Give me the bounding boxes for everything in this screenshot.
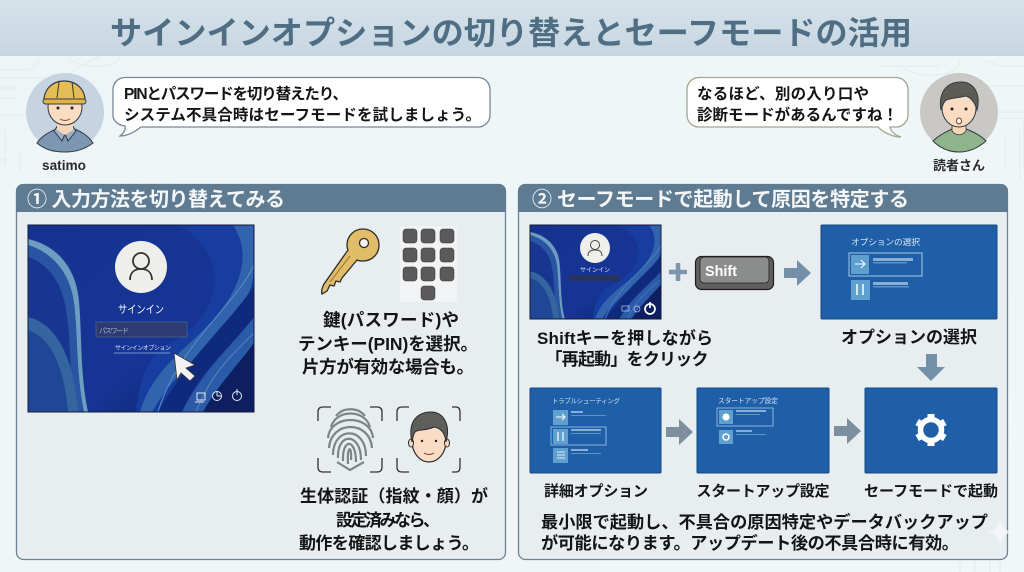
icon: face scan (397, 407, 460, 472)
caption: password and PIN (298, 310, 478, 377)
icon: fingerprint scan (318, 407, 382, 472)
arrow (917, 354, 945, 381)
panel heading 1 (16, 184, 506, 212)
title banner: サインインオプションの切り替えとセーフモードの活用 (110, 15, 912, 51)
caption: biometrics (299, 486, 488, 553)
caption: biometrics: 動作を確認しましょう。 (299, 534, 479, 553)
icon: key (322, 229, 379, 294)
step: troubleshooting screen: トラブルシューティング (552, 396, 621, 405)
speech bubble: satimo: PINとパスワードを切り替えたり、 (124, 85, 348, 103)
arrow (666, 419, 693, 445)
step: sign-in screen (530, 225, 661, 319)
step: troubleshooting screen (530, 388, 661, 473)
caption: password and PIN: 鍵(パスワード)や (323, 310, 459, 330)
caption: boot in safe mode: セーフモードで起動 (864, 483, 998, 500)
sign-in screen (28, 225, 254, 412)
icon: numeric keypad (400, 226, 457, 302)
caption: option selection: オプションの選択 (841, 328, 977, 347)
icon: gear (915, 414, 947, 446)
uniform (37, 128, 93, 152)
summary text: 最小限で起動し、不具合の原因特定やデータバックアップ (541, 512, 988, 532)
speech bubble: reader (687, 78, 908, 137)
sign-in screen: サインイン (118, 303, 164, 316)
panel: input method (16, 184, 506, 560)
panel heading 2 (518, 184, 1008, 212)
caption: startup settings: スタートアップ設定 (696, 483, 830, 500)
key: Shift: Shift (705, 263, 737, 280)
speech bubble: satimo (113, 78, 490, 136)
caption: press Shift and restart (537, 328, 713, 369)
caption: press Shift and restart: 「再起動」をクリック (546, 350, 708, 369)
sign-in screen: サインインオプション (115, 345, 171, 352)
panel heading 2: ② セーフモードで起動して原因を特定する (532, 188, 909, 211)
character: satimo: satimo (42, 157, 86, 173)
caption: password and PIN: 片方が有効な場合も。 (302, 357, 474, 377)
step: option selection screen (821, 225, 997, 319)
arrow (834, 418, 861, 444)
step: startup settings screen (697, 388, 829, 473)
key: Shift (696, 256, 774, 290)
plus sign (669, 263, 687, 281)
character: reader (920, 73, 998, 173)
caption: press Shift and restart: Shiftキーを押しながら (537, 328, 713, 348)
character: satimo (26, 73, 104, 173)
speech bubble: satimo: システム不具合時はセーフモードを試しましょう。 (124, 106, 481, 124)
panel heading 1: ① 入力方法を切り替えてみる (27, 188, 285, 211)
character: reader: 読者さん (933, 158, 985, 173)
caption: password and PIN: テンキー(PIN)を選択。 (298, 334, 478, 354)
step: startup settings screen: スタートアップ設定 (718, 396, 778, 405)
step: safe mode screen (865, 388, 997, 473)
caption: advanced options: 詳細オプション (544, 482, 648, 500)
title banner (0, 0, 1024, 56)
speech bubble: reader: なるほど、別の入り口や (697, 85, 869, 103)
summary text (541, 512, 988, 553)
panel: safe mode (518, 184, 1008, 560)
caption: biometrics: 設定済みなら、 (336, 511, 440, 530)
speech bubble: reader: 診断モードがあるんですね！ (697, 105, 898, 124)
step: sign-in screen: サインイン (580, 267, 610, 274)
arrow (784, 260, 811, 286)
step: option selection screen: オプションの選択 (851, 236, 920, 247)
caption: biometrics: 生体認証（指紋・顔）が (300, 486, 488, 506)
summary text: が可能になります。アップデート後の不具合時に有効。 (541, 533, 959, 553)
sign-in screen: パスワード (99, 327, 129, 335)
